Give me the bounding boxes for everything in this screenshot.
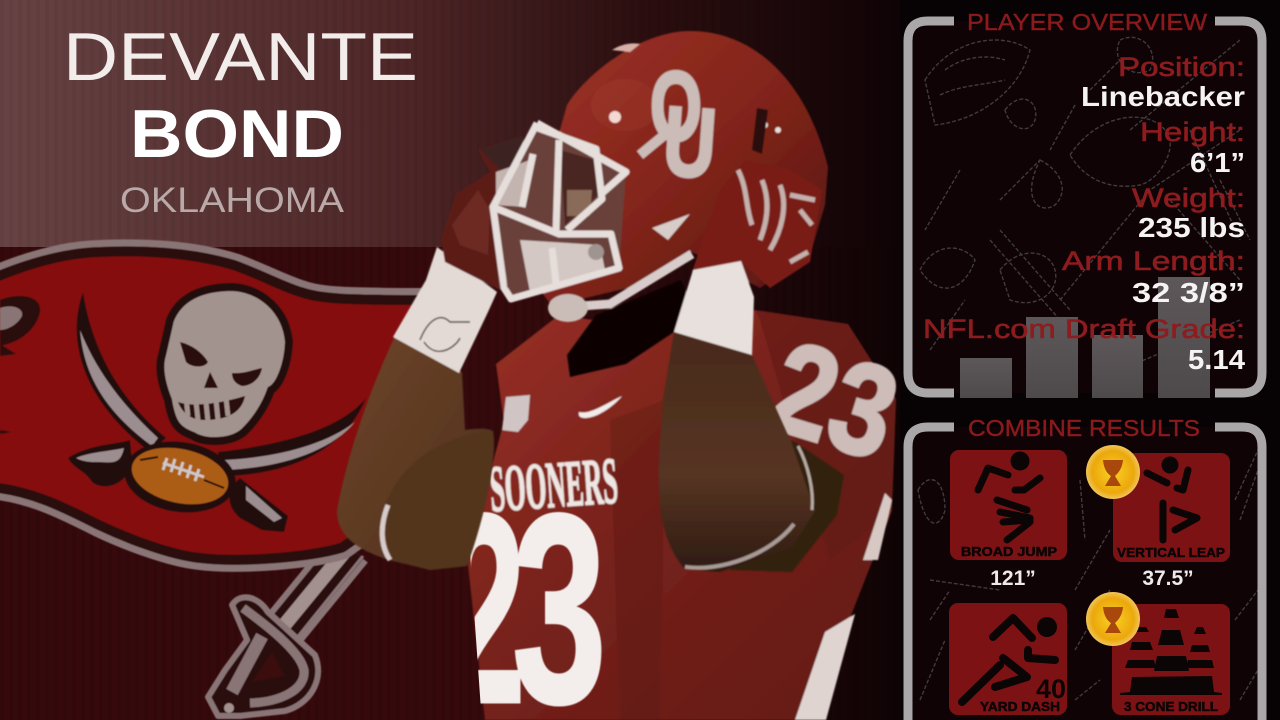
skeleton line art	[918, 450, 1258, 700]
right sword	[218, 398, 366, 532]
value: vertical leap: 37.5”	[1142, 567, 1194, 590]
bar chart graphic	[960, 277, 1210, 398]
position stat	[1081, 52, 1245, 112]
tile: forty yard dash	[949, 603, 1067, 715]
helmet logo	[650, 51, 720, 199]
position stat: Linebacker	[1081, 81, 1245, 112]
tile: forty yard dash: YARD DASH	[980, 700, 1060, 714]
flag tail swirl	[0, 296, 40, 346]
skull	[160, 287, 289, 441]
height stat: 6’1”	[1190, 147, 1245, 178]
skeleton line art	[920, 37, 1250, 370]
icon: broad jump	[978, 452, 1040, 540]
panel backdrop	[908, 427, 1262, 720]
helmet chin strap	[552, 254, 692, 308]
buccaneers flag logo	[0, 256, 430, 716]
draft grade stat	[923, 314, 1245, 375]
icon: vertical leap	[1147, 456, 1197, 540]
medal: vertical leap	[1086, 445, 1140, 499]
helmet logo: O	[650, 51, 702, 161]
icon: sprinter	[962, 617, 1057, 702]
jersey chest number	[470, 511, 602, 708]
left glove	[441, 136, 530, 290]
right wrist tape	[674, 261, 754, 355]
left wrist tape	[393, 247, 497, 373]
tile: three cone drill	[1112, 604, 1230, 715]
panel frame	[908, 21, 1262, 393]
football	[120, 435, 240, 519]
neck shadow	[567, 280, 690, 377]
tile: vertical leap: VERTICAL LEAP	[1117, 546, 1225, 560]
draft grade stat: NFL.com Draft Grade:	[923, 314, 1245, 344]
conference badge	[502, 395, 530, 432]
panel heading: COMBINE RESULTS	[968, 415, 1200, 441]
icon: cones	[1120, 609, 1222, 695]
first name: DEVANTE	[63, 19, 418, 95]
right glove	[692, 160, 822, 288]
facemask	[489, 123, 626, 299]
arm length stat	[1062, 246, 1245, 308]
flag pole and sword guard	[208, 548, 363, 716]
weight stat: Weight:	[1132, 183, 1245, 213]
panel: player overview	[908, 9, 1262, 398]
weight stat: 235 lbs	[1138, 212, 1245, 243]
helmet logo: U	[660, 85, 720, 199]
jersey	[467, 310, 914, 720]
right arm	[659, 261, 844, 572]
panel: combine results	[908, 415, 1262, 720]
left sword	[68, 292, 166, 486]
player name heading	[63, 19, 418, 220]
tile: broad jump: BROAD JUMP	[961, 545, 1057, 559]
tile: broad jump	[950, 450, 1067, 560]
helmet	[489, 31, 828, 322]
sleeve number: 23	[755, 312, 914, 488]
draft grade stat: 5.14	[1188, 344, 1245, 375]
height stat	[1140, 117, 1245, 178]
value: broad jump: 121”	[990, 567, 1036, 590]
arm length stat: Arm Length:	[1062, 246, 1245, 276]
player photo illustration	[337, 31, 844, 572]
panel backdrop	[908, 21, 1262, 393]
height stat: Height:	[1140, 117, 1245, 147]
arm length stat: 32 3/8”	[1132, 277, 1245, 308]
panel heading: PLAYER OVERVIEW	[967, 9, 1207, 35]
left arm	[337, 136, 530, 570]
tile: forty yard dash: 40	[1036, 674, 1066, 704]
jersey: SOONERS	[487, 444, 620, 526]
weight stat	[1132, 183, 1245, 243]
flag body	[0, 256, 430, 555]
swoosh	[579, 396, 622, 418]
panel frame	[908, 427, 1262, 720]
last name: BOND	[130, 96, 344, 172]
position stat: Position:	[1118, 52, 1245, 82]
medal: three cone drill	[1086, 592, 1140, 646]
college: OKLAHOMA	[120, 181, 345, 220]
tile: three cone drill: 3 CONE DRILL	[1124, 700, 1218, 714]
tile: vertical leap	[1113, 453, 1230, 562]
